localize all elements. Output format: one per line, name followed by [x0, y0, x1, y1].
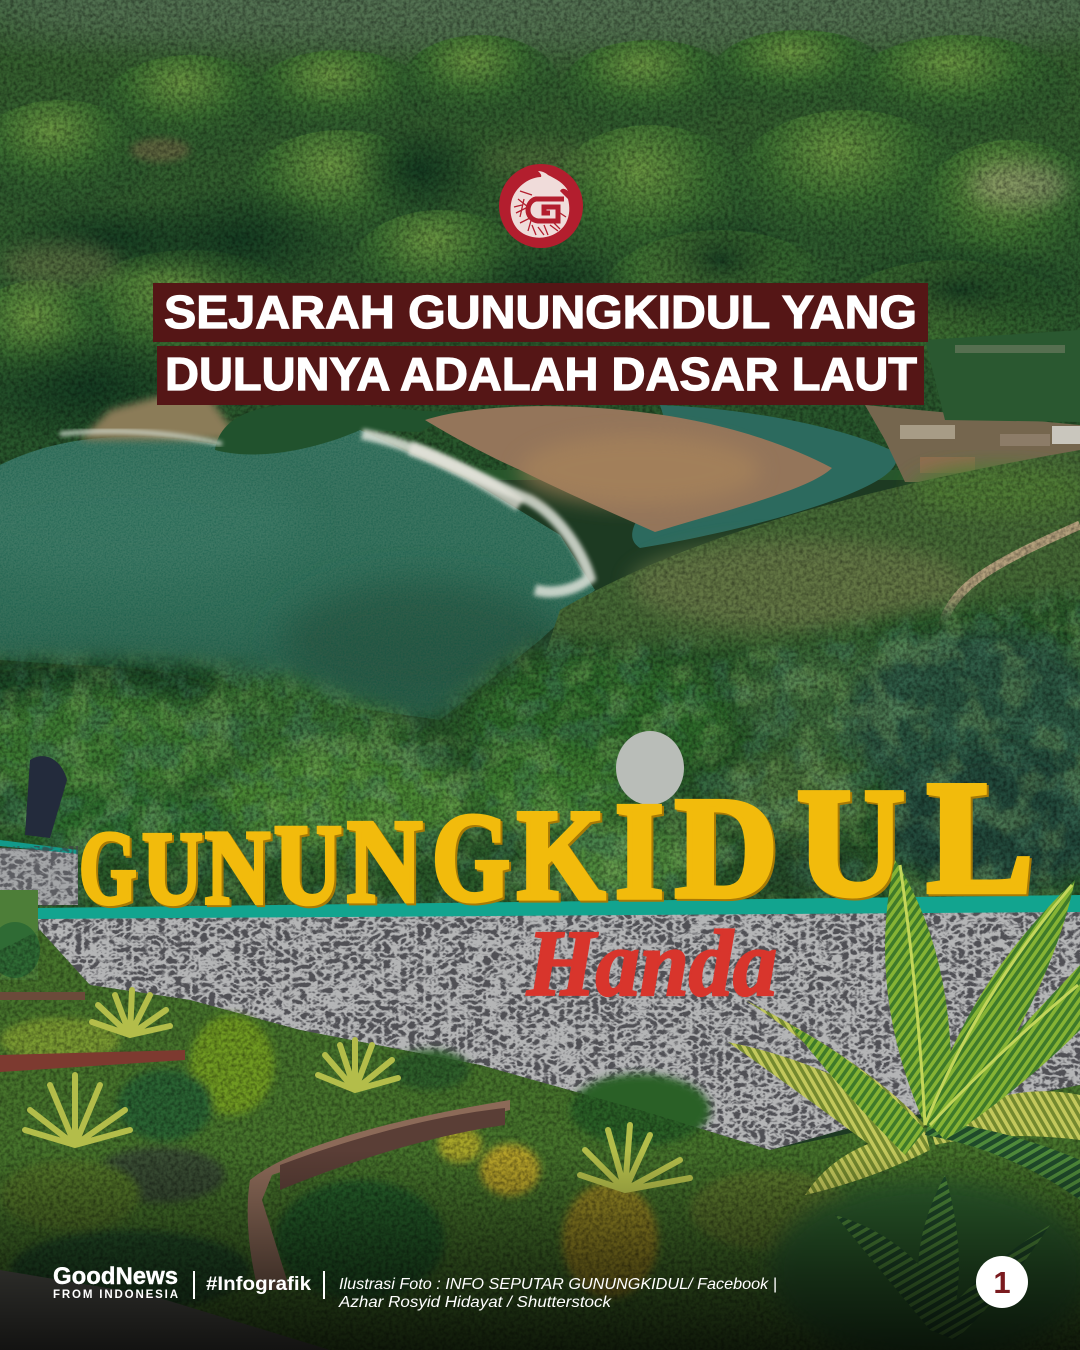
GUNUNGKIDUL sign letters: U: [274, 802, 342, 928]
GUNUNGKIDUL sign letters: K: [517, 784, 605, 927]
page number badge: 1: [993, 1265, 1011, 1300]
statue silhouette: [25, 756, 67, 838]
GUNUNGKIDUL sign letters: D: [675, 768, 778, 927]
sea bay: [0, 385, 600, 720]
GUNUNGKIDUL sign letters: U: [142, 812, 203, 926]
village on the shore: [865, 330, 1080, 482]
footer: [53, 1256, 1028, 1311]
palm tree: [728, 860, 1080, 1350]
sandy beach and lagoon: [425, 405, 897, 548]
GUNUNGKIDUL sign letters: G: [432, 788, 510, 928]
bottom dark gradient: [0, 1150, 1080, 1350]
stone wall: [38, 905, 1080, 1155]
photo credit: [338, 1276, 777, 1311]
brand logotype: FROM INDONESIA: [53, 1289, 178, 1301]
GUNUNGKIDUL sign letters: U: [797, 757, 905, 928]
GUNUNGKIDUL sign letters: I: [615, 775, 664, 927]
white globe behind trees: [616, 731, 684, 805]
title line 2: DULUNYA ADALAH DASAR LAUT: [165, 348, 917, 400]
photo credit: Ilustrasi Foto : INFO SEPUTAR GUNUNGKIDUL/ Facebook |: [339, 1276, 777, 1293]
GUNUNGKIDUL sign letters: N: [205, 809, 270, 927]
GUNUNGKIDUL sign letters: G: [79, 809, 137, 926]
logo: garuda G emblem: [499, 164, 583, 248]
GUNUNGKIDUL sign letters: L: [927, 749, 1033, 926]
Handa sign lettering: Handa: [526, 912, 777, 1016]
palm ribs: [900, 865, 1078, 1125]
upper wall segment: [0, 840, 78, 925]
hills: [0, 0, 1080, 480]
page number badge: [976, 1256, 1028, 1308]
right slope: [540, 450, 1080, 670]
garden foliage: [0, 890, 1080, 1350]
hashtag: #Infografik: [206, 1274, 311, 1295]
GUNUNGKIDUL sign letters: N: [347, 796, 422, 928]
GUNUNGKIDUL sign letters: [79, 749, 1033, 928]
divider right: [323, 1271, 325, 1299]
spiky garden plants: [25, 990, 690, 1190]
teal band: [38, 895, 1080, 919]
photo credit: Azhar Rosyid Hidayat / Shutterstock: [338, 1294, 612, 1311]
brand logotype: GoodNews: [53, 1263, 178, 1290]
title banner: [153, 283, 928, 405]
title line 1: SEJARAH GUNUNGKIDUL YANG: [164, 286, 917, 338]
lower dark plant: [835, 1175, 1050, 1340]
tree line: [0, 589, 1080, 908]
divider left: [193, 1271, 195, 1299]
palm fronds: [728, 860, 1080, 1200]
